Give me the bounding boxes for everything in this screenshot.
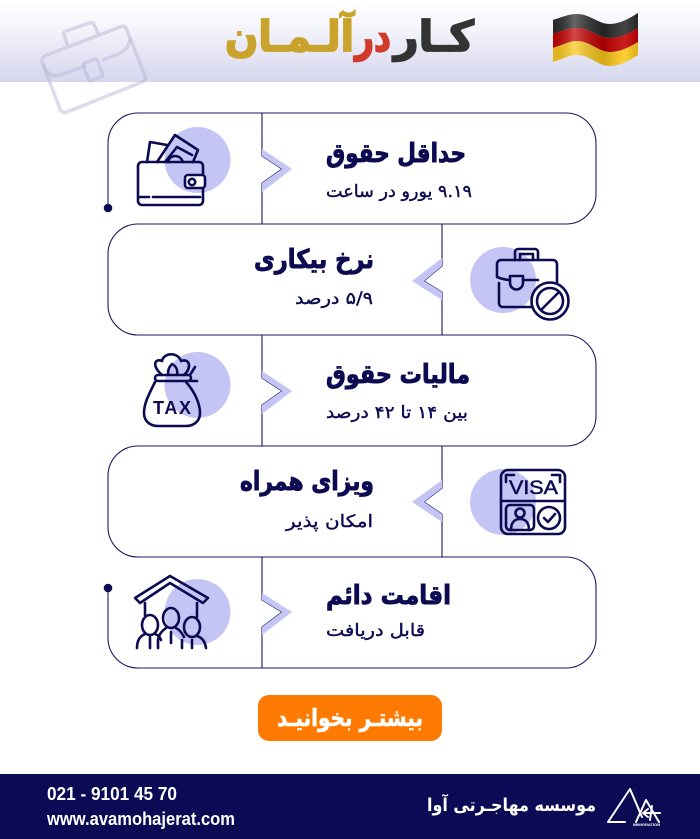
subtext: ۹.۱۹ یورو در ساعت xyxy=(326,182,472,202)
heading: مالیات حقوق xyxy=(326,360,470,390)
title: آلـمـان xyxy=(225,11,355,61)
panel: companion visa xyxy=(240,467,565,535)
icon: tax bag: TAX xyxy=(153,398,191,418)
subtext: ۵/۹ درصد xyxy=(295,289,373,309)
icon: briefcase with no sign xyxy=(470,247,568,320)
button: read more: بیشتـر بخوانیـد xyxy=(277,704,423,732)
chevron xyxy=(262,149,292,192)
icon: visa card xyxy=(470,469,565,535)
heading: ویزای همراه xyxy=(240,467,374,497)
subtext: بین ۱۴ تا ۴۲ درصد xyxy=(326,403,468,423)
button: read more xyxy=(258,695,442,741)
logo xyxy=(608,789,660,827)
icon: german flag xyxy=(553,13,638,66)
subtext: امکان پذیر xyxy=(285,512,373,532)
title: در xyxy=(353,12,391,61)
logo: IMMIGRATION xyxy=(633,822,660,827)
chevron xyxy=(262,371,292,414)
chevron xyxy=(412,258,442,300)
panel: unemployment rate xyxy=(254,245,568,320)
heading: نرخ بیکاری xyxy=(254,245,374,275)
connector dot bottom xyxy=(104,584,112,592)
footer band xyxy=(0,774,700,839)
chevron xyxy=(262,593,292,635)
panel: permanent residence xyxy=(135,576,451,648)
header band xyxy=(0,0,700,82)
icon: visa card: VISA xyxy=(509,478,558,499)
website: www.avamohajerat.com xyxy=(46,809,235,829)
subtext: قابل دریافت xyxy=(326,621,425,641)
heading: حداقل حقوق xyxy=(326,139,466,169)
chevron xyxy=(412,480,442,522)
icon: family house xyxy=(135,576,230,648)
icon: briefcase watermark xyxy=(42,23,146,113)
panel: income tax xyxy=(144,352,470,426)
title: کـار xyxy=(392,12,475,61)
icon: wallet xyxy=(138,127,230,205)
panel: minimum wage xyxy=(138,127,472,205)
heading: اقامت دائم xyxy=(326,581,451,611)
panel: serpentine outline xyxy=(108,113,596,668)
connector dot top xyxy=(104,204,112,212)
institute name: موسسه مهاجـرتی آوا xyxy=(427,793,596,816)
phone number: 021 - 9101 45 70 xyxy=(47,784,177,804)
icon: tax bag xyxy=(144,352,230,426)
title xyxy=(225,11,475,61)
